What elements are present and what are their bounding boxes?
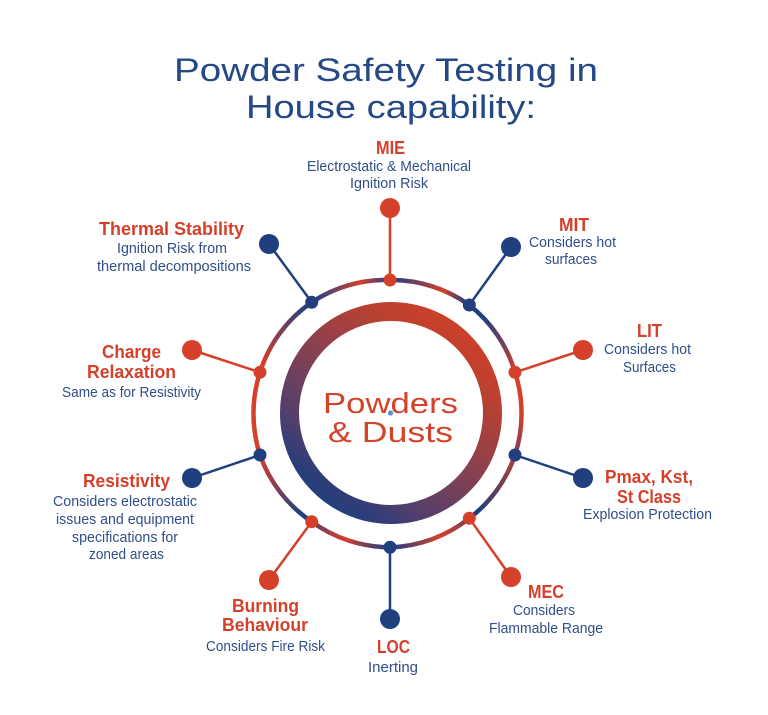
label: Burning Behaviour (206, 595, 326, 655)
centre label: Powders & Dusts: & Dusts (328, 417, 453, 449)
label: Resistivity: Resistivity (83, 470, 171, 491)
label: MIT: MIT (559, 214, 590, 235)
label: Pmax, Kst, St Class: St Class (617, 486, 681, 507)
spoke: LOC (380, 541, 400, 629)
spoke: Thermal Stability (259, 234, 318, 309)
label: Burning Behaviour: Behaviour (222, 614, 308, 635)
label: Resistivity: specifications for (72, 530, 178, 546)
label: Pmax, Kst, St Class: Pmax, Kst, (605, 466, 693, 487)
spoke: MIE (380, 198, 400, 286)
label: LIT (604, 320, 691, 376)
label: Resistivity: Considers electrostatic (53, 494, 197, 510)
label: MIE: MIE (376, 137, 405, 158)
label: Thermal Stability: Thermal Stability (99, 218, 245, 239)
label: Resistivity: issues and equipment (56, 512, 194, 528)
label: LIT: Surfaces (623, 360, 676, 376)
label: Charge Relaxation: Same as for Resistivity (62, 385, 202, 401)
label: Charge Relaxation: Charge (102, 341, 161, 362)
label: Charge Relaxation: Relaxation (87, 361, 176, 382)
spoke: Charge Relaxation (182, 340, 266, 379)
label: LOC (368, 636, 418, 676)
label: LIT: Considers hot (604, 342, 691, 358)
spoke: LIT (508, 340, 593, 379)
label: Pmax, Kst, St Class: Explosion Protection (583, 507, 712, 523)
label: MEC: Flammable Range (489, 621, 603, 637)
label: MEC (489, 581, 603, 637)
title: House capability: (246, 89, 536, 125)
label: Thermal Stability: thermal decompositions (97, 259, 251, 275)
title: Powder Safety Testing in (174, 52, 598, 88)
label: LOC: Inerting (368, 660, 418, 676)
label: MIE (307, 137, 471, 192)
spoke: MEC (463, 512, 521, 587)
spoke: MIT (463, 237, 521, 312)
label: Thermal Stability: Ignition Risk from (117, 241, 227, 257)
centre label: Powders & Dusts: Powders (323, 388, 458, 420)
label: Resistivity: zoned areas (89, 547, 164, 563)
spoke: Pmax (508, 448, 593, 488)
label: Burning Behaviour: Considers Fire Risk (206, 639, 326, 655)
label: Resistivity (53, 470, 197, 563)
centre label: Powders & Dusts (323, 388, 458, 449)
label: Thermal Stability (97, 218, 251, 275)
label: Pmax, Kst, St Class (583, 466, 712, 523)
title (174, 52, 598, 125)
spoke: Burning Behaviour (259, 515, 318, 590)
label: MIE: Electrostatic & Mechanical (307, 159, 471, 175)
label: Charge Relaxation (62, 341, 202, 401)
label: Burning Behaviour: Burning (232, 595, 299, 616)
label: MEC: Considers (513, 603, 575, 619)
label: MIT: surfaces (545, 252, 597, 268)
outer ring (253, 280, 522, 547)
spoke: Resistivity (182, 448, 266, 488)
label: LOC: LOC (377, 636, 410, 657)
label: MIT (529, 214, 616, 268)
label: MEC: MEC (528, 581, 564, 602)
label: LIT: LIT (637, 320, 663, 341)
label: MIT: Considers hot (529, 235, 616, 251)
inner gradient ring (290, 312, 492, 514)
label: MIE: Ignition Risk (350, 176, 429, 192)
